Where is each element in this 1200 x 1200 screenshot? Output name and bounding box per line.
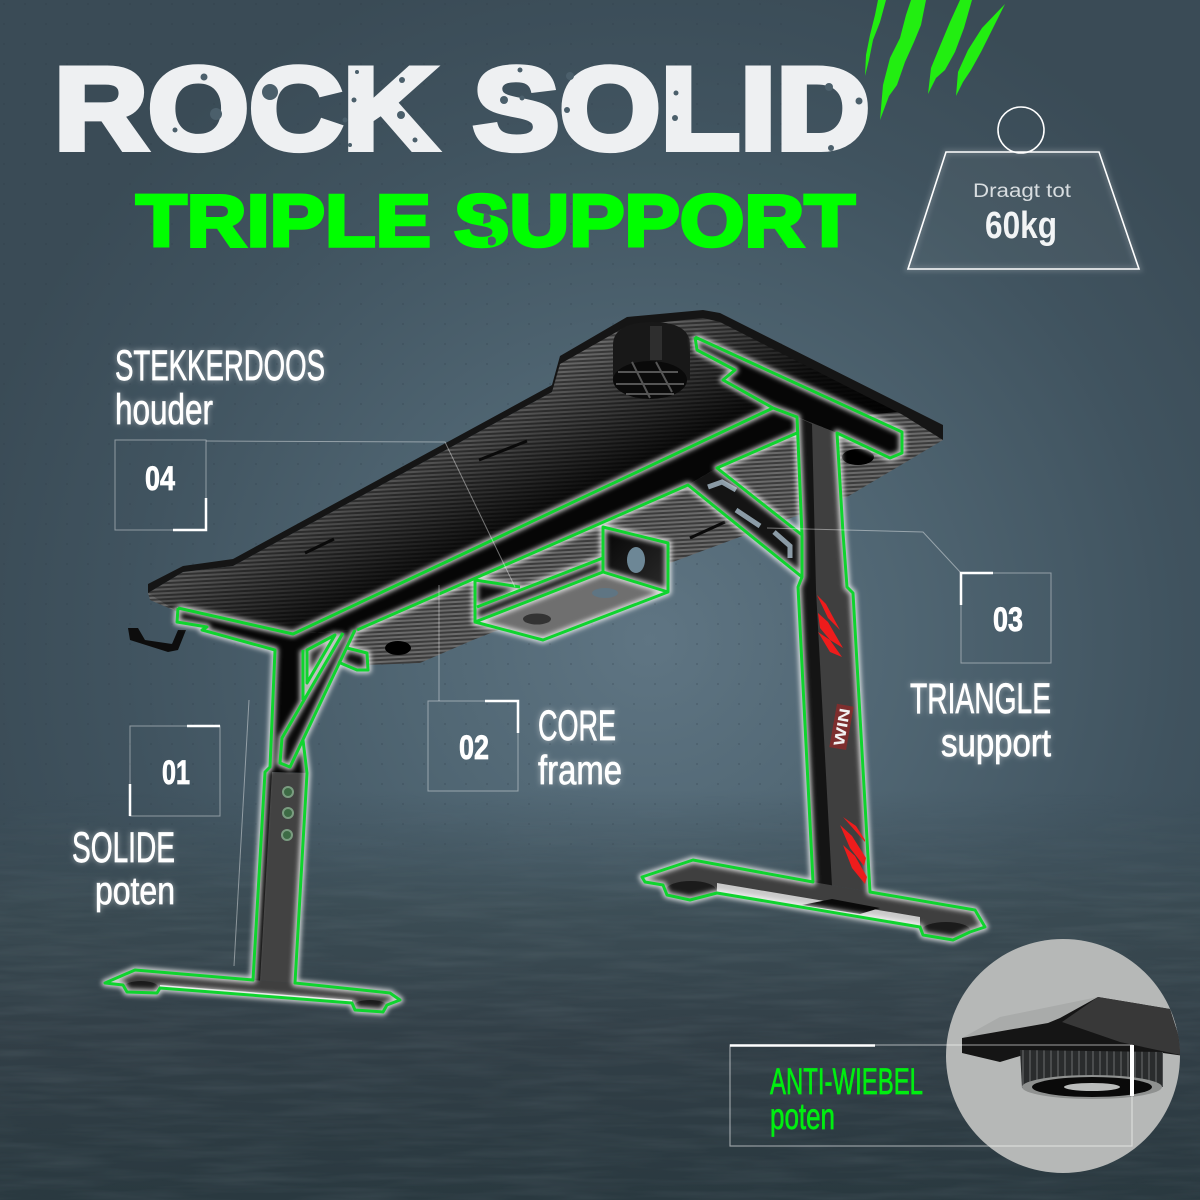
feet pads: [124, 881, 970, 1012]
icon: weight 60kg: Draagt tot: [973, 181, 1072, 202]
callout 02: CORE frame: frame: [538, 747, 622, 793]
callout 04: STEKKERDOOS houder: 04: [145, 460, 175, 498]
callout 01: SOLIDE poten: 01: [162, 754, 190, 792]
callout 01: SOLIDE poten: SOLIDE: [72, 824, 175, 872]
callout 02: CORE frame: CORE: [538, 702, 616, 750]
callout 01: SOLIDE poten: poten: [95, 870, 175, 913]
callout 03: TRIANGLE support: [767, 528, 1051, 765]
storage box for power strip: [475, 527, 668, 640]
icon: weight 60kg: [908, 107, 1139, 269]
leg logo: WIN: [831, 707, 854, 747]
headphone hook: [128, 628, 186, 652]
callout 02: CORE frame: [428, 585, 622, 793]
callout: ANTI-WIEBEL poten: ANTI-WIEBEL: [770, 1061, 923, 1102]
callout 03: TRIANGLE support: support: [941, 722, 1051, 765]
cable grommet cup: [613, 322, 690, 399]
green highlight outlines: [105, 337, 985, 1012]
icon: green claw marks: [865, 0, 1005, 120]
height adjustment holes: [282, 787, 293, 840]
detail circle: anti-wobble foot: [946, 939, 1185, 1173]
callout 04: STEKKERDOOS houder: houder: [115, 386, 213, 434]
callout 04: STEKKERDOOS houder: [115, 342, 515, 587]
icon: weight 60kg: 60kg: [985, 205, 1057, 247]
desk illustration: [105, 310, 985, 1012]
callout 03: TRIANGLE support: TRIANGLE: [910, 675, 1051, 723]
callout 01: SOLIDE poten: [72, 700, 249, 966]
callout: ANTI-WIEBEL poten: [730, 1045, 1132, 1146]
red slashes on right leg: [817, 595, 867, 884]
green highlight glow outlines: [105, 337, 985, 1012]
frame beams and legs: [105, 337, 985, 1005]
title: ROCK SOLID: ROCK SOLID: [54, 43, 870, 174]
callout 04: STEKKERDOOS houder: STEKKERDOOS: [115, 342, 325, 390]
callout 02: CORE frame: 02: [459, 729, 489, 767]
callout 03: TRIANGLE support: 03: [993, 601, 1023, 639]
desk top panel: [148, 310, 943, 665]
callout: ANTI-WIEBEL poten: poten: [770, 1096, 835, 1137]
leg logo: [829, 704, 855, 750]
subtitle: TRIPLE SUPPORT: TRIPLE SUPPORT: [136, 181, 855, 262]
left triangle brace: [280, 630, 368, 767]
